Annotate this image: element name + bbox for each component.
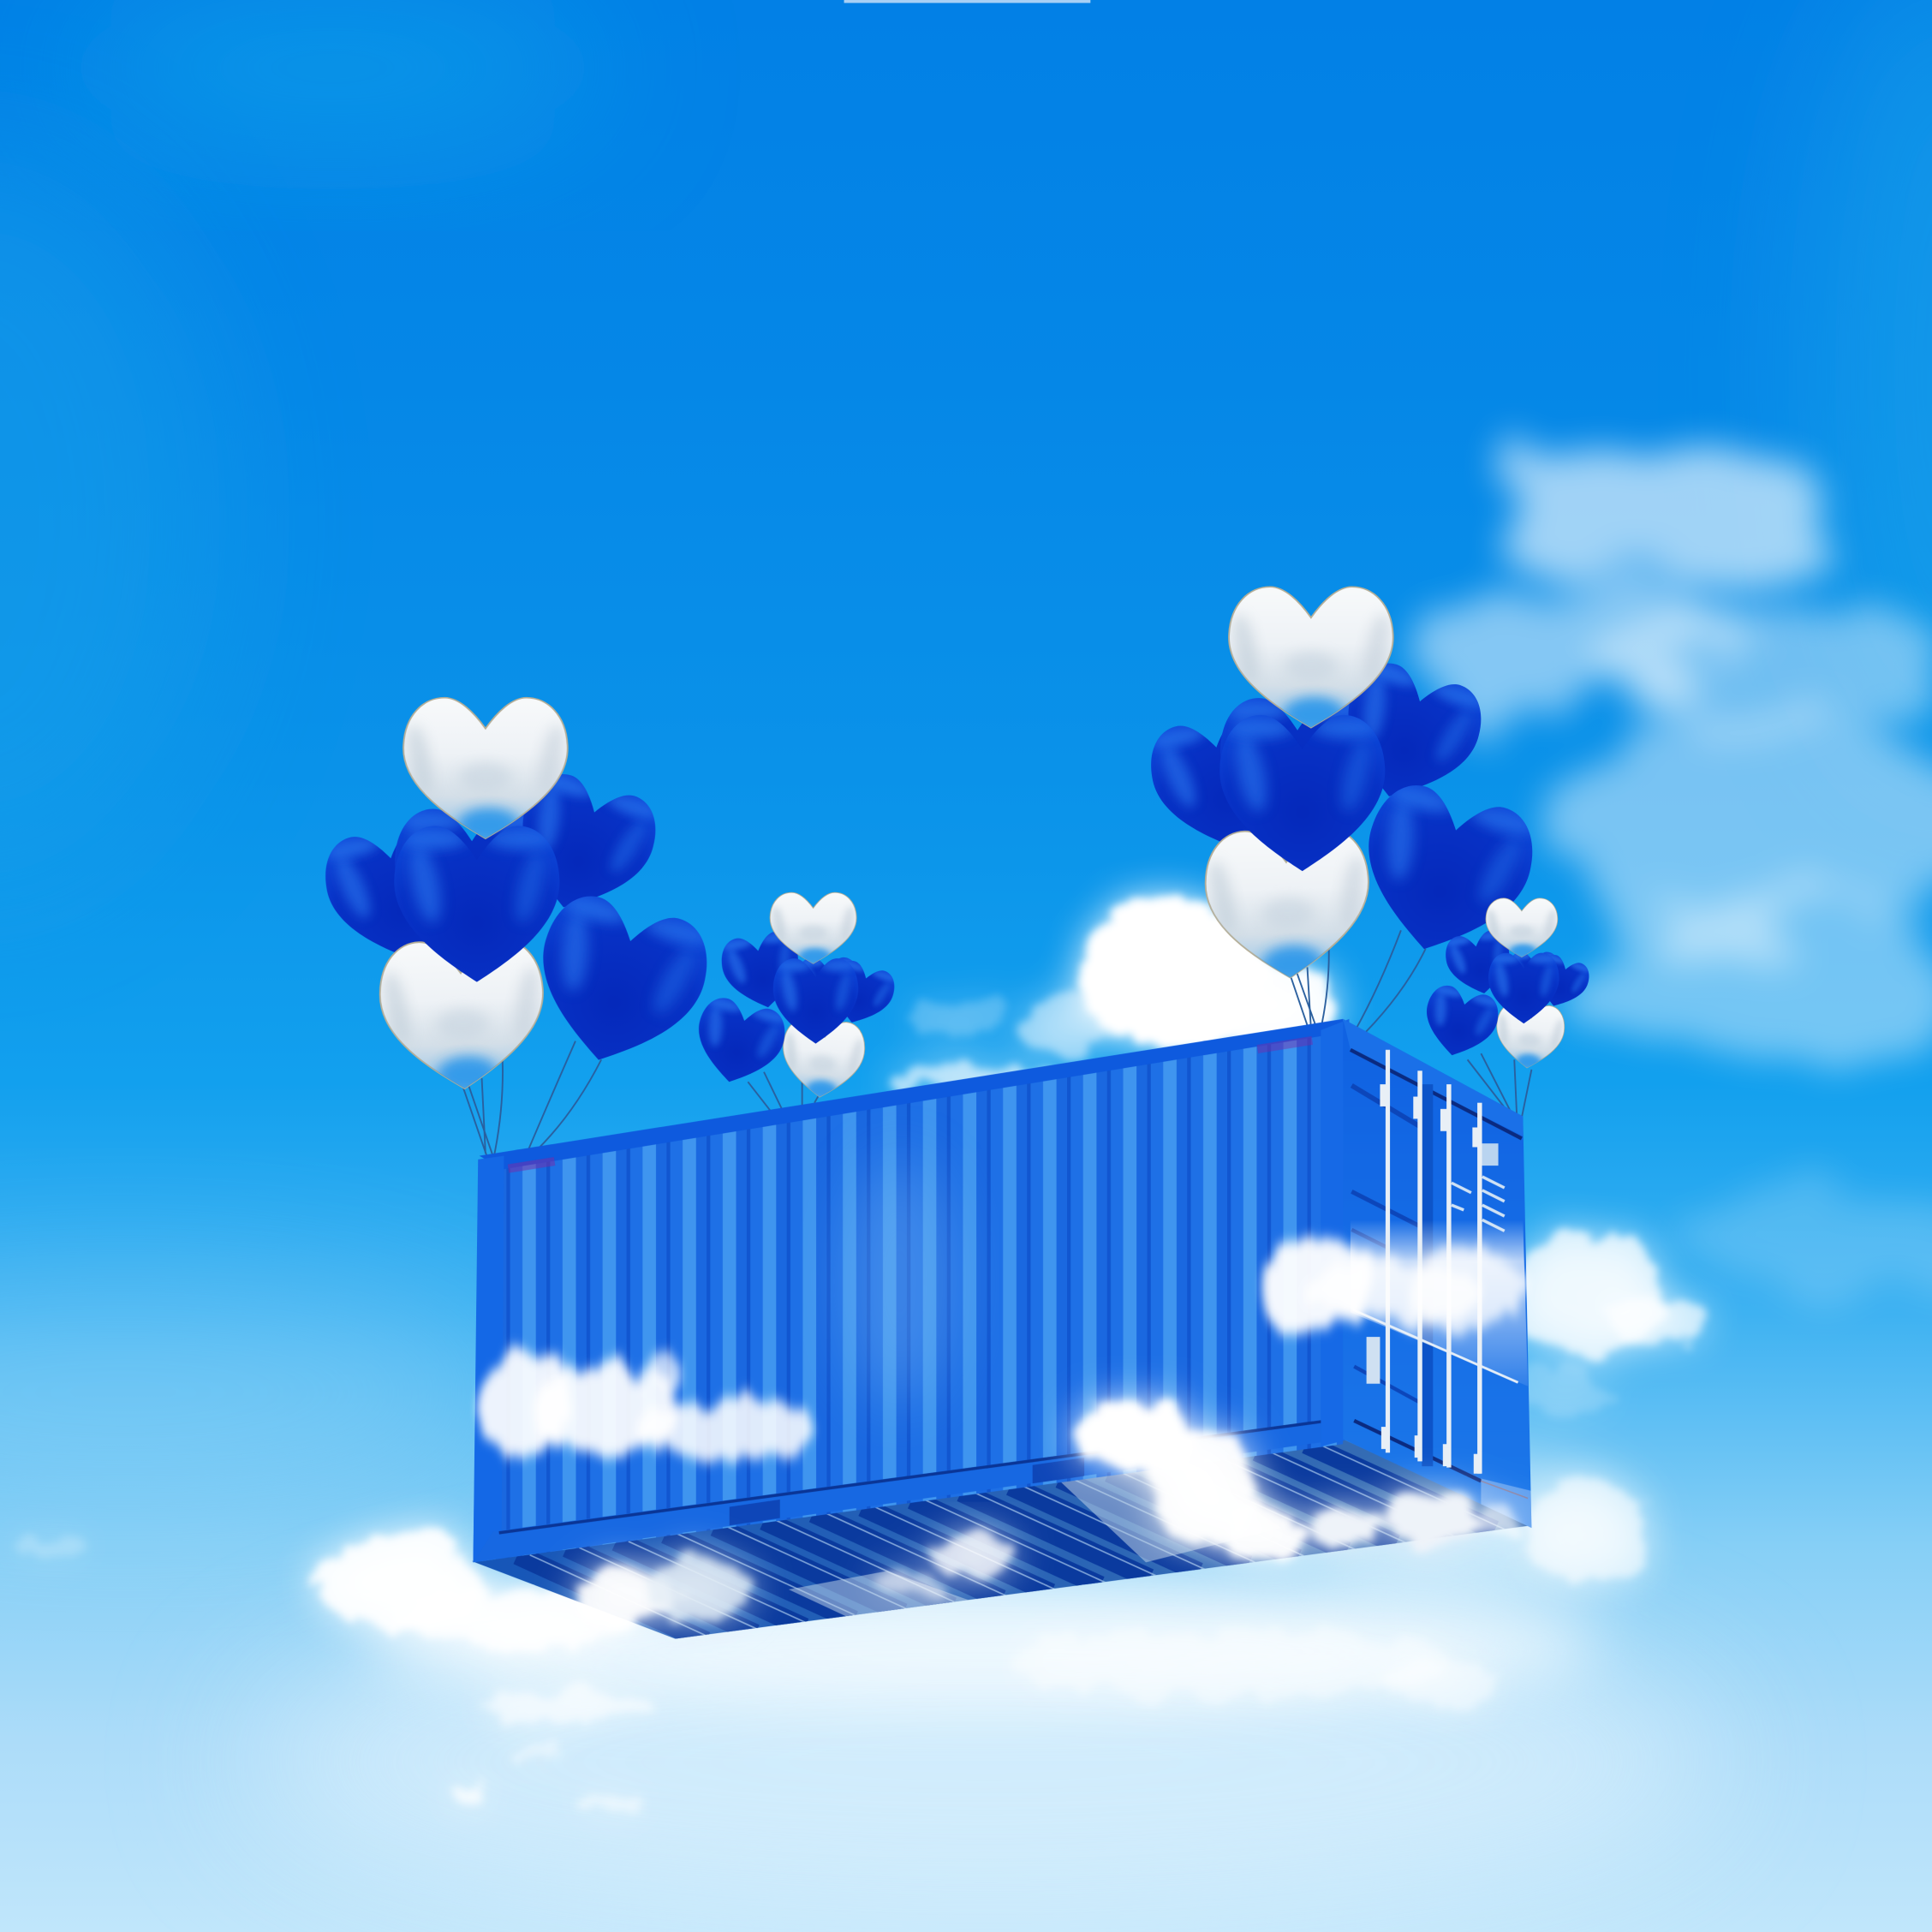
right corner post [1321,1019,1349,1446]
balloon cluster: small right [1417,898,1593,1073]
balloon strings [462,868,1531,1156]
top rail [480,1019,1343,1169]
corner castings [508,1157,555,1173]
cloud: beside the door end [1513,1232,1704,1417]
bottom rail [473,1419,1343,1562]
cloud: bottom right corner of long side [1070,1401,1524,1565]
left corner post [473,1156,504,1562]
cloud: across lower left of long side [474,1356,815,1460]
cloud: large bank under the container [8,1454,1725,1922]
lock bars [1380,1050,1482,1474]
cloud: behind the container top [893,897,1337,1093]
balloon cluster: small middle [687,892,899,1103]
container: door end [1343,1019,1531,1528]
balloon cluster: large left [317,698,719,1096]
container: corrugated long side [468,1011,1349,1577]
container: underside with floor beams [472,1439,1531,1641]
door frame and panel lines [1343,1019,1523,1136]
cloud: across door end [1259,1237,1523,1331]
cloud: under the container floor [570,1530,1011,1625]
balloon cluster: large right [1142,587,1544,985]
fork pockets [730,1500,780,1525]
cloud: upper right wisps [1417,444,1932,1294]
